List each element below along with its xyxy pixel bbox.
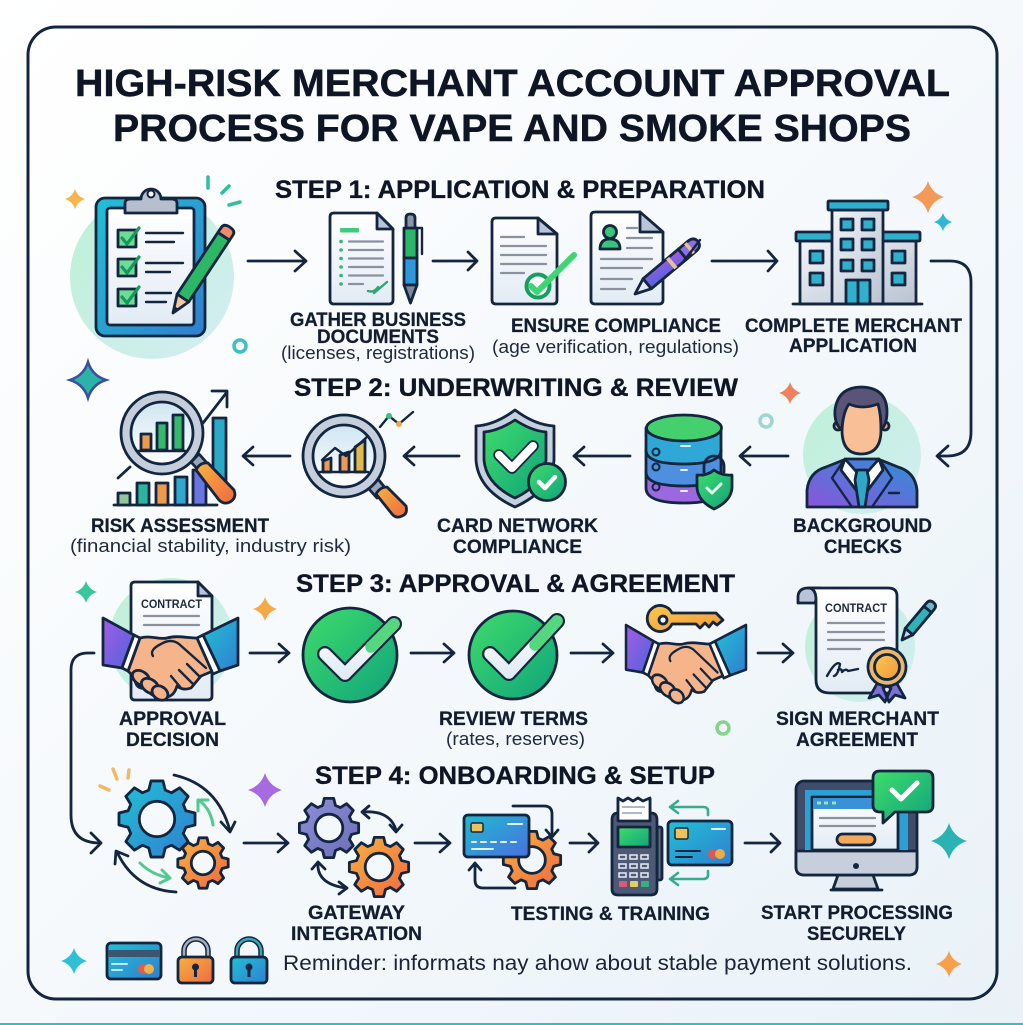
arrow: shield to magnifier: [404, 447, 459, 465]
label: ensure compliance: (age verification, regulations): [492, 336, 739, 357]
bottom accent line: [0, 1023, 1023, 1025]
label: approval decision: DECISION: [126, 729, 219, 751]
icon: sparkle teal right: [931, 823, 967, 859]
arrow: sync to terminal: [570, 834, 598, 852]
icon: contract and handshake: [103, 578, 238, 703]
icon: sparkle orange: [253, 597, 277, 621]
icon: monitor with approval bubble: [796, 771, 933, 890]
label: start processing securely: SECURELY: [807, 923, 906, 945]
label: ensure compliance: [492, 315, 739, 357]
label: risk assessment: [70, 515, 351, 556]
icon: teal padlock: [231, 939, 267, 983]
arrow: background to database: [740, 447, 788, 465]
icon: sparkle orange bottom: [936, 951, 962, 977]
icon: background check person: [803, 387, 921, 514]
icon: business documents and pen: [330, 213, 422, 304]
label: gather business documents: (licenses, registrations): [281, 342, 475, 363]
label: approval decision: APPROVAL: [119, 708, 226, 730]
icon: magnifier with rising chart: [303, 412, 413, 517]
label: background checks: BACKGROUND: [793, 515, 932, 537]
icon: risk assessment magnifier and bars: [114, 391, 235, 505]
heading: step 4: STEP 4: ONBOARDING & SETUP: [315, 762, 715, 790]
label: card network compliance: COMPLIANCE: [453, 536, 582, 558]
arrow: documents to compliance: [433, 252, 477, 270]
icon: contract and handshake: CONTRACT: [141, 599, 202, 611]
icon: ring teal right: [760, 415, 772, 427]
icon: footer credit card: [107, 943, 161, 979]
label: complete merchant application: COMPLETE MERCHANT: [745, 315, 962, 337]
title: PROCESS FOR VAPE AND SMOKE SHOPS: [113, 108, 911, 150]
label: sign merchant agreement: [776, 708, 939, 751]
icon: setup gears: [100, 769, 235, 892]
label: card network compliance: CARD NETWORK: [437, 515, 598, 537]
label: risk assessment: (financial stability, industry risk): [70, 535, 351, 556]
icon: ring green: [717, 722, 729, 734]
label: complete merchant application: [745, 315, 962, 357]
arrow: check to review terms: [411, 644, 454, 662]
arrow: approval to check: [250, 644, 289, 662]
icon: compliance document with check: [492, 218, 574, 304]
arrow: application to background checks: [931, 261, 971, 466]
icon: handshake with key: [626, 606, 746, 706]
label: approval decision: [119, 708, 226, 751]
icon: green check two: [469, 611, 557, 699]
label: ensure compliance: ENSURE COMPLIANCE: [511, 315, 721, 337]
text: reminder: Reminder: informats nay ahow about stable payment solutions.: [283, 952, 912, 975]
label: gather business documents: GATHER BUSINESS: [290, 309, 466, 331]
label: gather business documents: [281, 309, 475, 363]
icon: green check one: [303, 608, 397, 702]
label: gateway integration: INTEGRATION: [291, 923, 422, 945]
arrow: terminal to monitor: [745, 834, 780, 852]
heading: step 2: STEP 2: UNDERWRITING & REVIEW: [294, 374, 738, 402]
arrow: handshake to agreement: [758, 644, 793, 662]
label: gateway integration: [291, 902, 422, 945]
label: background checks: CHECKS: [824, 536, 902, 558]
arrow: compliance to application: [712, 251, 777, 271]
arrow: review to key handshake: [571, 644, 613, 662]
arrow: clipboard to documents: [248, 251, 306, 271]
icon: signed contract with seal: [798, 588, 937, 702]
arrow: magnifier to risk assessment: [243, 447, 290, 465]
icon: office building: [793, 201, 922, 304]
label: background checks: [793, 515, 932, 558]
icon: sparkle green: [75, 581, 97, 603]
label: complete merchant application: APPLICATION: [789, 335, 917, 357]
label: risk assessment: RISK ASSESSMENT: [91, 515, 269, 537]
label: sign merchant agreement: AGREEMENT: [796, 729, 918, 751]
icon: clipboard checklist: [70, 177, 240, 359]
title: [75, 63, 950, 150]
label: review terms: REVIEW TERMS: [439, 708, 588, 730]
title: HIGH-RISK MERCHANT ACCOUNT APPROVAL: [75, 63, 950, 105]
icon: sparkle teal small: [934, 213, 952, 231]
arrow: setup to gateway: [244, 834, 288, 852]
label: review terms: [439, 708, 588, 749]
icon: sparkle coral: [779, 382, 801, 404]
heading: step 1: STEP 1: APPLICATION & PREPARATION: [275, 176, 765, 204]
icon: applicant form with pen: [591, 212, 702, 304]
label: sign merchant agreement: SIGN MERCHANT: [776, 708, 939, 730]
label: review terms: (rates, reserves): [446, 728, 585, 749]
icon: secure database: [646, 415, 732, 509]
icon: orange padlock: [178, 939, 213, 983]
icon: card network shield: [476, 410, 566, 507]
arrow: agreement loop to onboarding: [71, 653, 101, 853]
label: start processing securely: [761, 902, 953, 945]
icon: sparkle teal diamond: [70, 362, 106, 398]
label: testing and training: TESTING & TRAINING: [511, 903, 710, 925]
icon: gateway gears: [299, 798, 409, 897]
heading: step 3: STEP 3: APPROVAL & AGREEMENT: [296, 570, 735, 598]
icon: sparkle teal bottom: [61, 948, 87, 974]
arrow: database to shield: [574, 447, 630, 465]
icon: sparkle orange left: [65, 189, 85, 209]
icon: card and gear sync: [464, 806, 561, 889]
icon: payment terminal and card: [612, 798, 732, 895]
label: start processing securely: START PROCESSING: [761, 902, 953, 924]
icon: sparkle orange large: [912, 181, 944, 213]
arrow: gateway to testing: [415, 834, 450, 852]
label: card network compliance: [437, 515, 598, 558]
icon: ring teal: [234, 340, 246, 352]
label: gateway integration: GATEWAY: [308, 902, 405, 924]
icon: signed contract with seal: CONTRACT: [825, 603, 887, 615]
icon: sparkle purple: [248, 773, 282, 807]
label: gather business documents: DOCUMENTS: [317, 326, 439, 348]
